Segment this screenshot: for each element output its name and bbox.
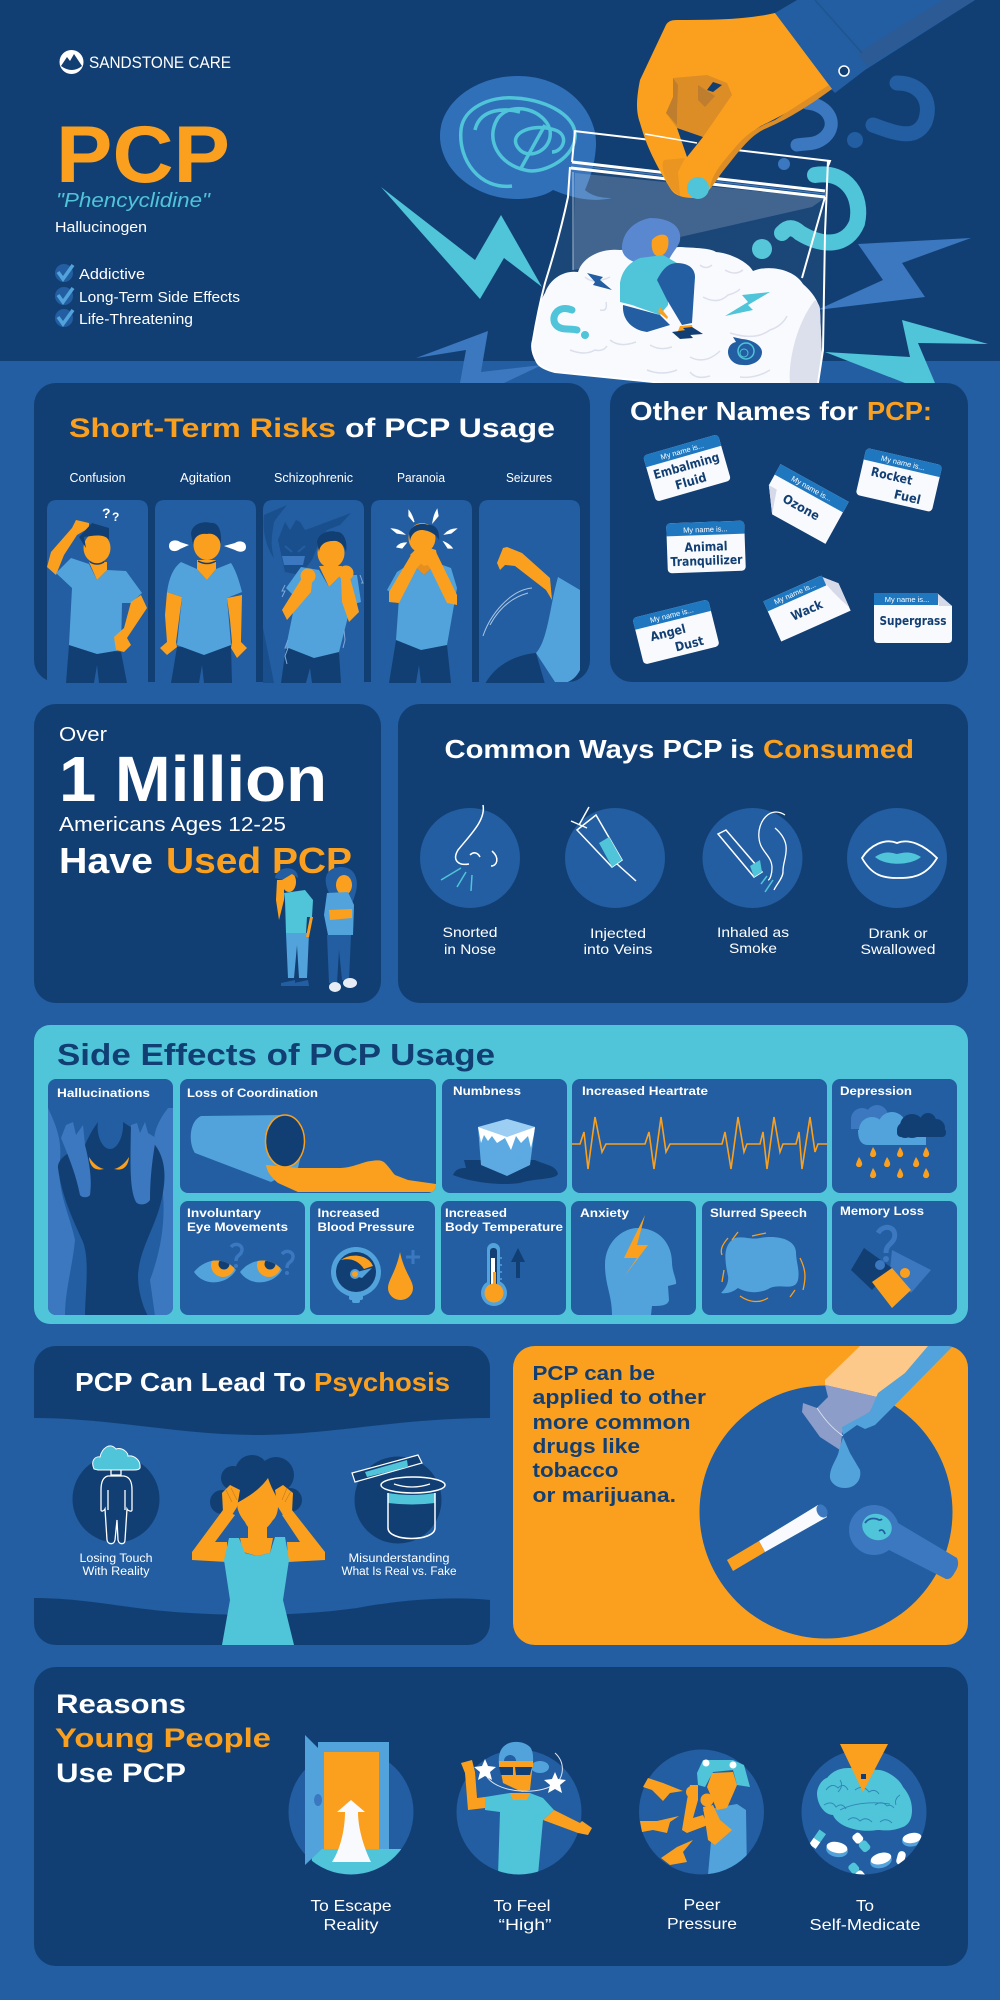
heading: psychosis [75,1367,450,1397]
text: applied to other drugs: or marijuana. [532,1484,676,1507]
labels [442,924,936,957]
labels: Snorted [442,924,498,940]
labels: To Feel [494,1898,550,1915]
card: confusion [47,500,148,683]
heading: reasons: Reasons [56,1689,186,1719]
panel: applied to other drugs [513,1346,968,1645]
text: Have Used PCP: Used PCP [166,840,352,881]
panel: common ways consumed [398,704,968,1003]
cell: increased heartrate: Increased Heartrate [582,1084,708,1098]
title: PCP: PCP [56,110,230,200]
name tag: Animal Tranquilizer: Animal [684,538,728,555]
label: Hallucinogen: Hallucinogen [55,219,147,236]
bag outline and zipper [532,131,830,383]
cell: anxiety: Anxiety [580,1206,629,1220]
panel: psychosis [34,1346,490,1645]
bag haze [573,173,825,270]
cell: increased body temperature [441,1201,566,1315]
card: confusion: ? [102,505,111,521]
text: Over: Over [59,724,107,746]
panel: other names [610,383,968,682]
text: applied to other drugs [532,1362,706,1507]
heading: psychosis: Psychosis [314,1367,450,1397]
cell: slurred speech: Slurred Speech [710,1206,807,1220]
icon: losing touch [72,1446,160,1544]
icon: lips [847,808,947,908]
name tag: Embalming Fluid: Fluid [673,469,708,493]
card: agitation [155,500,256,683]
labels: into Veins [584,941,652,957]
name tag: Rocket Fuel: Rocket [870,464,914,488]
heading: short-term risks: of PCP Usage [345,413,555,443]
checklist: Long-Term Side Effects [79,289,240,306]
panel: reasons young people [34,1667,968,1966]
labels: Drank or [868,925,928,941]
labels: Reality [324,1917,378,1934]
risk labels: Agitation [180,471,231,485]
logo: Sandstone Care [60,50,231,74]
heading: reasons: Use PCP [56,1758,186,1788]
cell: loss of coordination: Loss of Coordination [187,1086,318,1100]
name tag: Rocket Fuel [856,448,942,512]
logo: Sandstone Care: SANDSTONE CARE [89,53,231,72]
heading: psychosis: PCP Can Lead To [75,1367,306,1397]
name tag: Supergrass [874,593,952,643]
panel: short-term risks [34,383,590,684]
cell: hallucinations: Hallucinations [57,1086,150,1100]
stat: 1 Million: 1 Million [59,743,327,815]
icon: cigarette smoke [702,808,802,908]
hand [637,13,832,199]
panel: 1 million statistic [34,704,381,1003]
text: applied to other drugs: more common [532,1411,690,1434]
icon: cup and strip [352,1455,445,1544]
labels: Self-Medicate [810,1917,921,1934]
name tag: Rocket Fuel: My name is... [880,454,926,472]
panel: side effects [34,1025,968,1324]
circle background [700,1386,952,1638]
spoon with residue [849,1505,958,1579]
cell: involuntary eye movements: Involuntary [187,1206,261,1220]
cell: depression: Depression [840,1084,912,1098]
cigarette [727,1502,830,1571]
heading: other names: PCP: [867,396,932,426]
labels: To Escape [310,1898,392,1915]
name tag: Supergrass: My name is... [885,595,929,604]
name tag: Angel Dust: Angel [649,621,687,644]
cell: numbness: Numbness [453,1084,521,1098]
name tag: Animal Tranquilizer: My name is... [683,524,728,535]
cell: involuntary eye movements: Eye Movements [187,1220,288,1234]
name tag: Wack [763,570,851,642]
name tag: Rocket Fuel: Fuel [893,486,922,507]
heading: reasons: Young People [55,1723,271,1753]
labels: Swallowed [860,941,936,957]
name tag: Ozone: My name is... [790,474,833,503]
zigzag shapes [381,187,988,383]
cell: memory loss [832,1201,957,1315]
text: applied to other drugs: applied to other [532,1386,706,1409]
text: Have Used PCP [59,840,352,881]
heading: consumed: Common Ways PCP is [444,734,754,764]
cell: anxiety [571,1201,696,1315]
labels: in Nose [444,941,496,957]
labels: What Is Real vs. Fake [342,1566,456,1578]
icon: peer pressure [639,1750,764,1875]
question marks [752,83,927,259]
cell: hallucinations [48,1079,173,1316]
labels: “High” [498,1917,552,1934]
labels: Peer [684,1897,721,1914]
plastic bag back [543,166,824,347]
powder cloud in bag [530,218,823,383]
text: applied to other drugs: drugs like [532,1435,640,1458]
heading: consumed: Consumed [763,734,914,764]
heading: short-term risks [69,413,555,443]
text: Americans Ages 12-25: Americans Ages 12-25 [59,814,286,836]
hero illustration: hand holding bag [381,0,988,383]
name tag: Ozone [757,464,849,544]
cell: increased body temperature: Increased [445,1206,507,1220]
name tag: Angel Dust: Dust [673,633,705,654]
risk labels: Seizures [506,471,552,485]
icon: nose [420,805,520,908]
name tag: Animal Tranquilizer: Tranquilizer [670,552,743,569]
cell: increased blood pressure: Blood Pressure [318,1220,415,1234]
seated girl [620,218,703,339]
cell: loss of coordination [180,1079,436,1193]
icon: self-medicate brain [802,1744,926,1883]
checklist: Addictive [79,266,145,283]
cell: involuntary eye movements [180,1201,305,1315]
name tag: Wack: Wack [788,596,825,624]
card: confusion: ? [112,510,119,524]
icon: door escape [288,1735,414,1880]
cell: memory loss: Memory Loss [840,1204,924,1218]
name tag: Embalming Fluid [643,434,731,502]
name tag: Wack: My name is... [773,580,817,607]
labels: Misunderstanding [348,1553,450,1565]
heading: other names [630,396,932,426]
labels [310,1897,921,1934]
header band [0,0,1000,361]
name tag: Angel Dust: My name is... [649,605,694,625]
icon: small bolts and question [554,273,770,365]
name tag: Animal Tranquilizer [666,521,746,573]
heading: short-term risks: Short-Term Risks [69,413,336,443]
two people [275,867,357,992]
risk labels: Paranoia [397,471,445,485]
labels: Smoke [729,940,777,956]
sleeve [775,0,975,93]
thought bubble with scribble [440,76,612,200]
heading: consumed [444,734,914,764]
woman holding head [192,1455,325,1645]
cell: slurred speech [702,1201,827,1315]
risk labels: Schizophrenic [274,471,353,485]
name tag: Angel Dust [632,599,720,665]
card: seizures [479,500,580,684]
icon: syringe [565,807,665,908]
labels: Inhaled as [717,924,789,940]
text: Have Used PCP: Have [59,840,153,881]
risk labels [70,471,552,485]
labels: With Reality [82,1566,150,1578]
name tag: Embalming Fluid: Embalming [652,449,721,482]
cell: increased blood pressure: Increased [318,1206,380,1220]
text: applied to other drugs: tobacco [532,1459,618,1482]
labels: To [856,1898,874,1915]
heading: reasons [55,1689,271,1788]
checklist [55,264,240,328]
cell: increased body temperature: Body Temperature [445,1220,563,1234]
labels [80,1553,456,1578]
labels: Pressure [667,1916,737,1933]
subtitle: Phencyclidine: "Phencyclidine" [56,190,211,212]
heading: other names: Other Names for [630,396,858,426]
cell: increased heartrate [572,1079,827,1193]
name tag: Embalming Fluid: My name is... [660,441,705,462]
text: applied to other drugs: PCP can be [532,1362,655,1385]
card: paranoia [371,500,472,683]
card: schizophrenic [263,500,364,683]
icon: feeling high [456,1742,592,1875]
cell: increased blood pressure [310,1201,435,1315]
checklist: Life-Threatening [79,311,193,328]
labels: Injected [590,925,646,941]
cell: depression [832,1079,957,1193]
risk labels: Confusion [70,471,126,485]
name tag: Supergrass: Supergrass [880,613,946,628]
heading: side effects: Side Effects of PCP Usage [57,1037,495,1072]
name tag: Ozone: Ozone [780,491,822,523]
cell: numbness [442,1079,567,1193]
dropper and droplet [802,1346,953,1488]
labels: Losing Touch [80,1553,152,1565]
